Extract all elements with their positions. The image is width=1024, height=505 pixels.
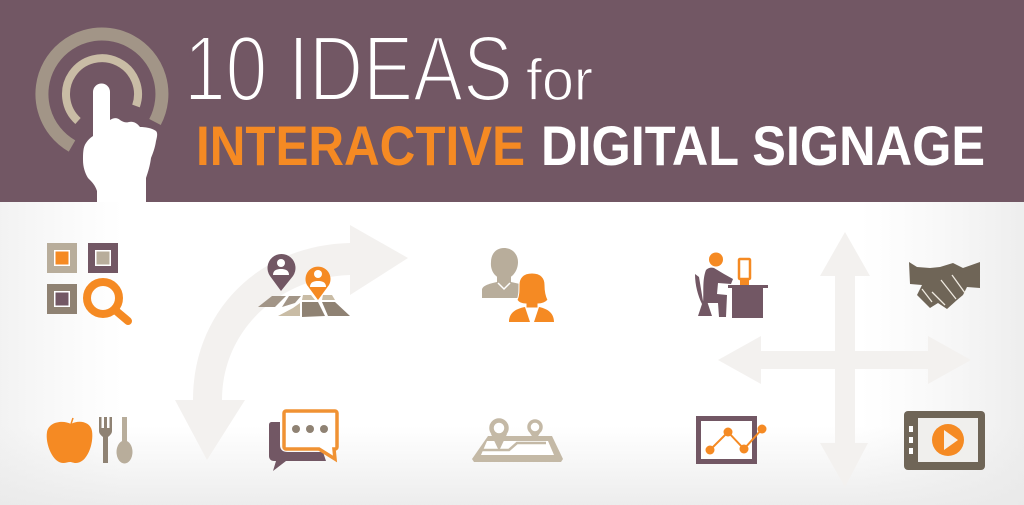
icon: touch hand with rings — [42, 34, 162, 202]
icon: apple — [47, 418, 92, 463]
icon: spoon — [116, 417, 132, 464]
title line one: 10 IDEAS — [184, 16, 513, 120]
header banner — [0, 0, 1024, 202]
icon: man and woman — [482, 248, 554, 322]
icon: QR code search — [50, 246, 128, 321]
icon: line chart on screen — [698, 418, 766, 462]
background — [0, 202, 1024, 505]
icon: video tablet — [904, 411, 985, 470]
icon: chat bubbles — [269, 411, 337, 471]
icon: navigation tablet map — [472, 420, 563, 462]
title line two: DIGITAL SIGNAGE — [541, 114, 985, 177]
arrow: four-way cross background — [718, 232, 971, 487]
title line two — [196, 114, 985, 177]
arrow: curved background — [175, 225, 408, 460]
icon: handshake — [909, 262, 980, 309]
icon: person at desk — [695, 252, 768, 318]
title line one: for — [526, 48, 593, 113]
icon: map with location pins — [258, 254, 350, 317]
title line two: INTERACTIVE — [196, 114, 525, 177]
icon: fork — [99, 417, 112, 463]
